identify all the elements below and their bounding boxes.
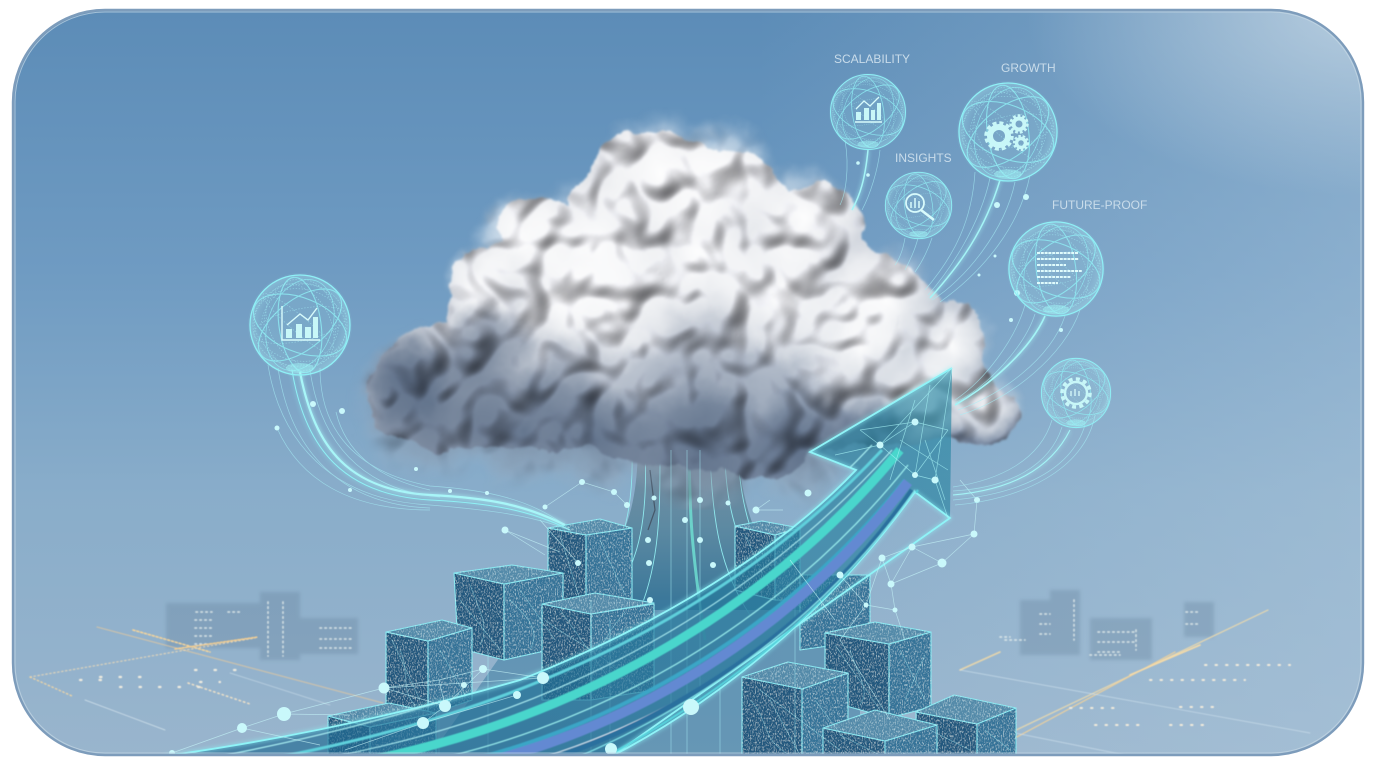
distant city left xyxy=(30,592,383,730)
arrowhead mesh xyxy=(835,368,952,518)
cube: bottom centre right xyxy=(823,710,937,758)
node network xyxy=(169,479,980,756)
cube: left xyxy=(386,620,472,715)
cloud base silhouette xyxy=(368,131,1015,482)
orb: scalability xyxy=(830,74,906,150)
arrow band background xyxy=(165,368,952,756)
cube: bottom left xyxy=(328,703,436,758)
arrow stripes xyxy=(200,445,918,768)
orb: insights xyxy=(884,172,952,240)
label: future-proof: FUTURE-PROOF xyxy=(1052,198,1147,212)
block backdrop xyxy=(430,600,860,756)
left data stream and orb xyxy=(244,270,570,530)
orb: growth xyxy=(958,82,1058,182)
cube: mid right back xyxy=(800,575,870,650)
cloud dark underside xyxy=(362,301,882,510)
distant city right xyxy=(960,590,1310,756)
block cubes xyxy=(328,519,1016,758)
label: insights: INSIGHTS xyxy=(895,151,952,165)
cube: bottom right xyxy=(916,695,1016,758)
stream: left xyxy=(292,370,570,530)
cloud stem xyxy=(624,461,800,614)
cloud bright masses xyxy=(440,105,1025,445)
data strands from stem xyxy=(439,450,795,756)
label: scalability: SCALABILITY xyxy=(834,52,910,66)
cube wire scratches xyxy=(392,535,1010,755)
cube: center left upper xyxy=(454,565,563,660)
orb: gear bottom right xyxy=(1038,355,1114,431)
orb: future-proof xyxy=(1008,221,1104,317)
growth arrow xyxy=(165,368,952,768)
cube: lower centre right xyxy=(742,662,848,758)
cube: center front xyxy=(542,593,654,700)
cube: back right xyxy=(735,521,800,600)
arrow outline xyxy=(165,368,952,756)
right data streams xyxy=(840,140,1095,505)
orb: chart left xyxy=(249,274,351,376)
cloud xyxy=(345,105,1025,525)
cube: back left xyxy=(548,519,632,610)
cube: right tall xyxy=(825,622,931,718)
label: growth: GROWTH xyxy=(1001,61,1056,75)
